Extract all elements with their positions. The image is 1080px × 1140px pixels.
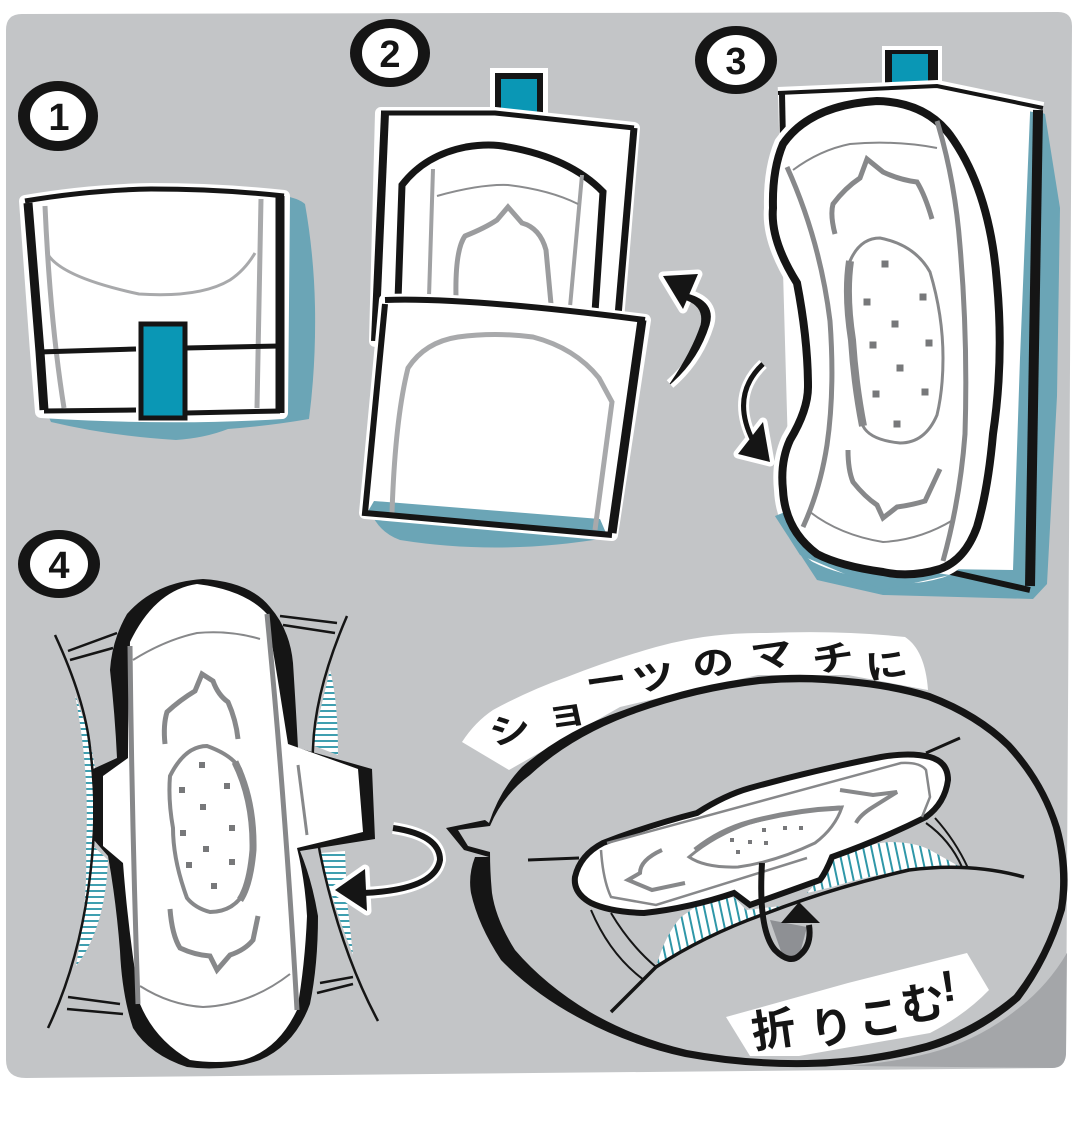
step 2 badge: 2 [379, 34, 401, 76]
absorbent core [169, 746, 253, 912]
teal shadow [41, 196, 315, 440]
teal tab [882, 46, 942, 88]
teal tab [490, 68, 548, 119]
step 4 badge [18, 530, 100, 598]
absorbent core [848, 238, 943, 443]
step 3: unfolded pad [773, 46, 1060, 599]
callout: zoomed view [446, 675, 1068, 1067]
bubble outline [446, 675, 1068, 1067]
arrow: wings fold [335, 828, 440, 911]
step 2 badge [350, 19, 430, 87]
step 1 badge: 1 [48, 97, 70, 139]
arrow: unfolding up [663, 274, 710, 384]
step 1: folded pad [25, 189, 315, 440]
arrow: fold in [761, 863, 820, 959]
callout text: shorts gusset: ショーツのマチに [486, 635, 911, 753]
shorts [48, 616, 378, 1028]
step 4: pad on shorts [48, 579, 378, 1068]
step 2: half-unfolded pad [365, 68, 645, 548]
teal shadow [370, 510, 612, 548]
folded pad [575, 754, 948, 913]
step 3 badge: 3 [725, 41, 747, 83]
arrow: unfolding down [738, 364, 770, 462]
teal tab [141, 324, 185, 418]
teal gusset stripes [807, 842, 962, 893]
callout label: fold in: 折りこむ! [749, 961, 959, 1058]
corner shadow [848, 953, 1067, 1068]
callout banner: top white label [462, 632, 928, 770]
step 4 badge: 4 [48, 545, 70, 587]
step 3 badge [695, 26, 777, 94]
step 1 badge [18, 81, 98, 151]
teal shadow [775, 108, 1060, 599]
